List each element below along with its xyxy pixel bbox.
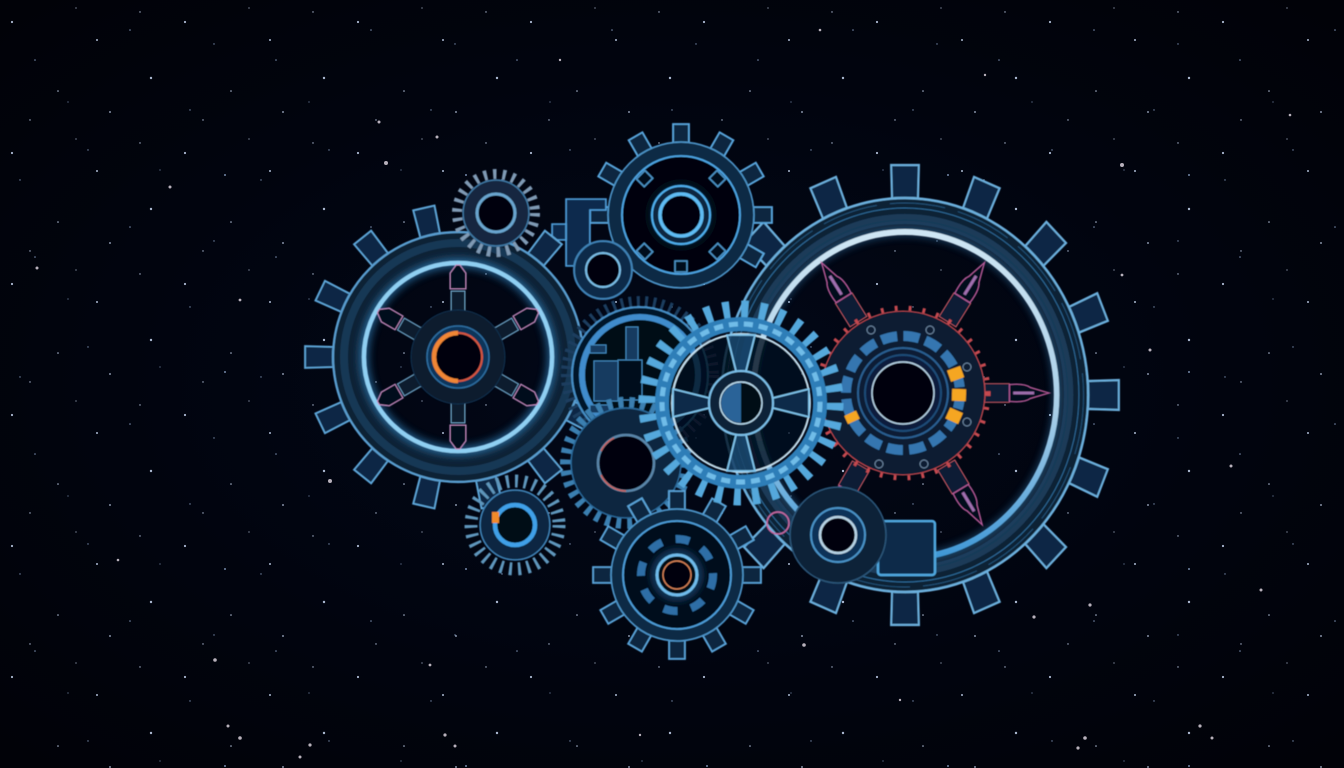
gear: small upper-middle gear [574,241,632,299]
hub: left gear [411,310,505,404]
spokes [813,257,1049,531]
teeth: bottom gear [593,491,761,659]
teeth: large gear [744,165,1119,625]
teeth: top gear [590,124,772,267]
teeth: left gear [305,205,601,509]
circuit block [590,327,642,413]
gear: bottom gear [593,491,761,659]
gear: lower-middle gear [566,403,686,523]
hub: large gear [813,257,1049,531]
inner tabs [636,170,726,272]
gear: small top-left gear [457,174,535,252]
gear: lower right small gear with block [767,487,935,583]
gear: large right gear [722,165,1119,625]
teeth: cyan gear [648,310,834,496]
bracket behind small gear [552,199,606,266]
gear: bright cyan front gear [648,310,834,496]
gear assembly [305,124,1119,659]
gear: left gear [305,205,601,509]
gear: centre dark gear [568,303,712,447]
orange indicators [844,366,966,424]
rim: large gear [722,198,1088,592]
gear: top gear [590,124,772,288]
spokes: left gear [374,265,542,449]
rim: left gear [333,232,583,482]
spokes: cyan gear [673,335,809,471]
square block [878,521,935,575]
gear: small bottom-left gear [471,481,559,569]
hub: cyan gear [709,371,773,435]
